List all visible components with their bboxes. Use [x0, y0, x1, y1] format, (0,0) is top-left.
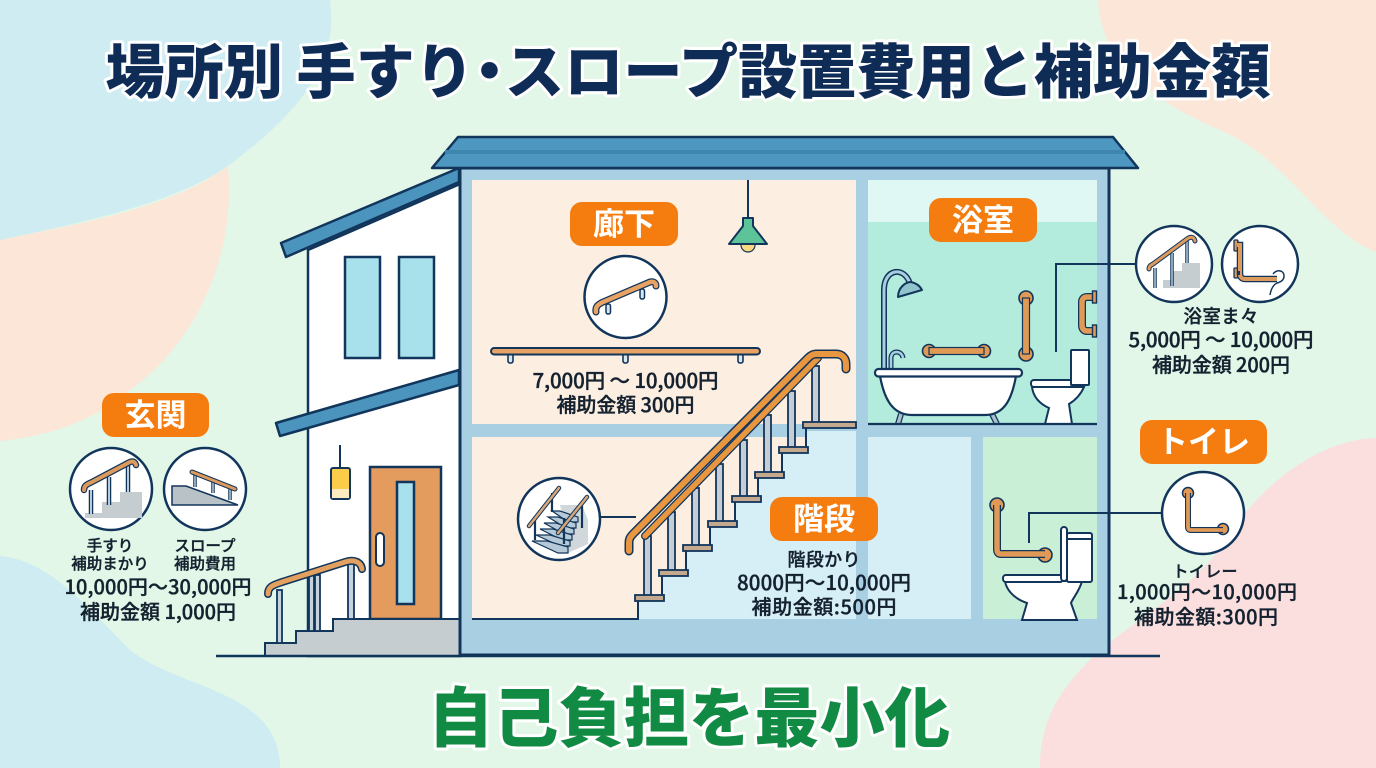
- upper annex roof: [281, 168, 459, 257]
- text: bathroom label: 浴室ま々: [1184, 303, 1258, 329]
- text: entrance subsidy: 補助金額 1,000円: [80, 596, 236, 625]
- heading: entrance: [102, 390, 209, 437]
- text: ramp label: スロープ: [174, 534, 236, 556]
- entrance handrail: [268, 561, 362, 643]
- icon: bathroom L bar: [1222, 226, 1298, 302]
- stair balusters: [644, 366, 819, 598]
- heading: corridor: [570, 199, 678, 246]
- title: 場所別 手すり・スロープ設置費用と補助金額: [106, 25, 1270, 110]
- staircase: [472, 354, 856, 619]
- entrance steps: [265, 619, 460, 656]
- main building shell: [460, 168, 1109, 655]
- text: entrance price: 10,000円～30,000円: [64, 571, 252, 600]
- entrance door: [370, 467, 441, 619]
- text: corridor subsidy: 補助金額 300円: [556, 389, 694, 418]
- toilet room toilet: [1003, 527, 1092, 620]
- heading: entrance: 玄関: [124, 390, 186, 435]
- icon: entrance ramp: [164, 448, 246, 530]
- house illustration: [265, 137, 1138, 656]
- pendant lamp: [729, 180, 767, 252]
- icon: corridor handrail: [584, 256, 666, 338]
- middle annex roof: [276, 370, 459, 436]
- text: handrail label: 補助まかり: [71, 552, 149, 574]
- bathtub with shower: [875, 272, 1022, 424]
- heading: stairs: 階段: [793, 494, 855, 539]
- bathroom floor line: [868, 423, 1097, 425]
- text: stairs label: 階段かり: [788, 546, 860, 572]
- bathroom toilet: [1031, 350, 1089, 424]
- room: corridor: [472, 180, 856, 424]
- room: toilet: [983, 437, 1097, 619]
- panel: bathroom: [929, 195, 1314, 378]
- icon: stairs: [518, 478, 600, 560]
- text: bathroom price: 5,000円 ～ 10,000円: [1128, 323, 1314, 353]
- corridor wall handrail: [491, 348, 760, 363]
- text: handrail label: 手すり: [87, 534, 133, 556]
- stair handrail: upper rail: [629, 354, 846, 551]
- text: ramp label: 補助費用: [174, 552, 236, 574]
- bathroom grab bars: [922, 291, 1096, 361]
- left annex wall: [308, 184, 460, 656]
- text: stairs subsidy: 補助金額:500円: [752, 591, 896, 620]
- main roof: [432, 137, 1138, 168]
- stair handrail: lower rail: [645, 358, 818, 536]
- heading: stairs: [770, 494, 878, 541]
- footer slogan: 自己負担を最小化: [428, 666, 950, 760]
- text: toilet label: トイレー: [1172, 558, 1238, 582]
- text: stairs price: 8000円～10,000円: [737, 566, 911, 596]
- annex windows: [345, 257, 434, 358]
- icon: entrance handrail: [70, 448, 152, 530]
- room: stairs: [472, 431, 856, 619]
- panel: toilet: [1117, 417, 1297, 630]
- stair risers: [472, 425, 806, 619]
- toilet room grab bar: [990, 498, 1052, 562]
- ground line: [216, 655, 1160, 657]
- entrance lamp: [331, 445, 350, 499]
- panel: stairs: [518, 478, 911, 620]
- text: corridor price: 7,000円 ～ 10,000円: [532, 364, 718, 394]
- leader: bathroom: [1056, 264, 1137, 352]
- panel: corridor: [532, 199, 718, 418]
- leader: toilet: [1029, 513, 1163, 543]
- heading: bathroom: [929, 195, 1037, 242]
- panel: entrance: [64, 390, 252, 625]
- text: toilet price: 1,000円～10,000円: [1117, 576, 1297, 605]
- leader: stairs: [600, 516, 636, 518]
- icon: toilet L bar: [1162, 472, 1244, 554]
- icon: bathroom handrail: [1136, 226, 1212, 302]
- stair treads: [635, 422, 856, 601]
- heading: bathroom: 浴室: [952, 195, 1014, 240]
- room: bathroom: [868, 180, 1097, 424]
- heading: corridor: 廊下: [593, 199, 655, 244]
- heading: toilet: トイレ: [1157, 417, 1250, 462]
- room: storage: [868, 437, 971, 619]
- text: toilet subsidy: 補助金額:300円: [1134, 601, 1278, 630]
- text: bathroom subsidy: 補助金額 200円: [1152, 349, 1290, 378]
